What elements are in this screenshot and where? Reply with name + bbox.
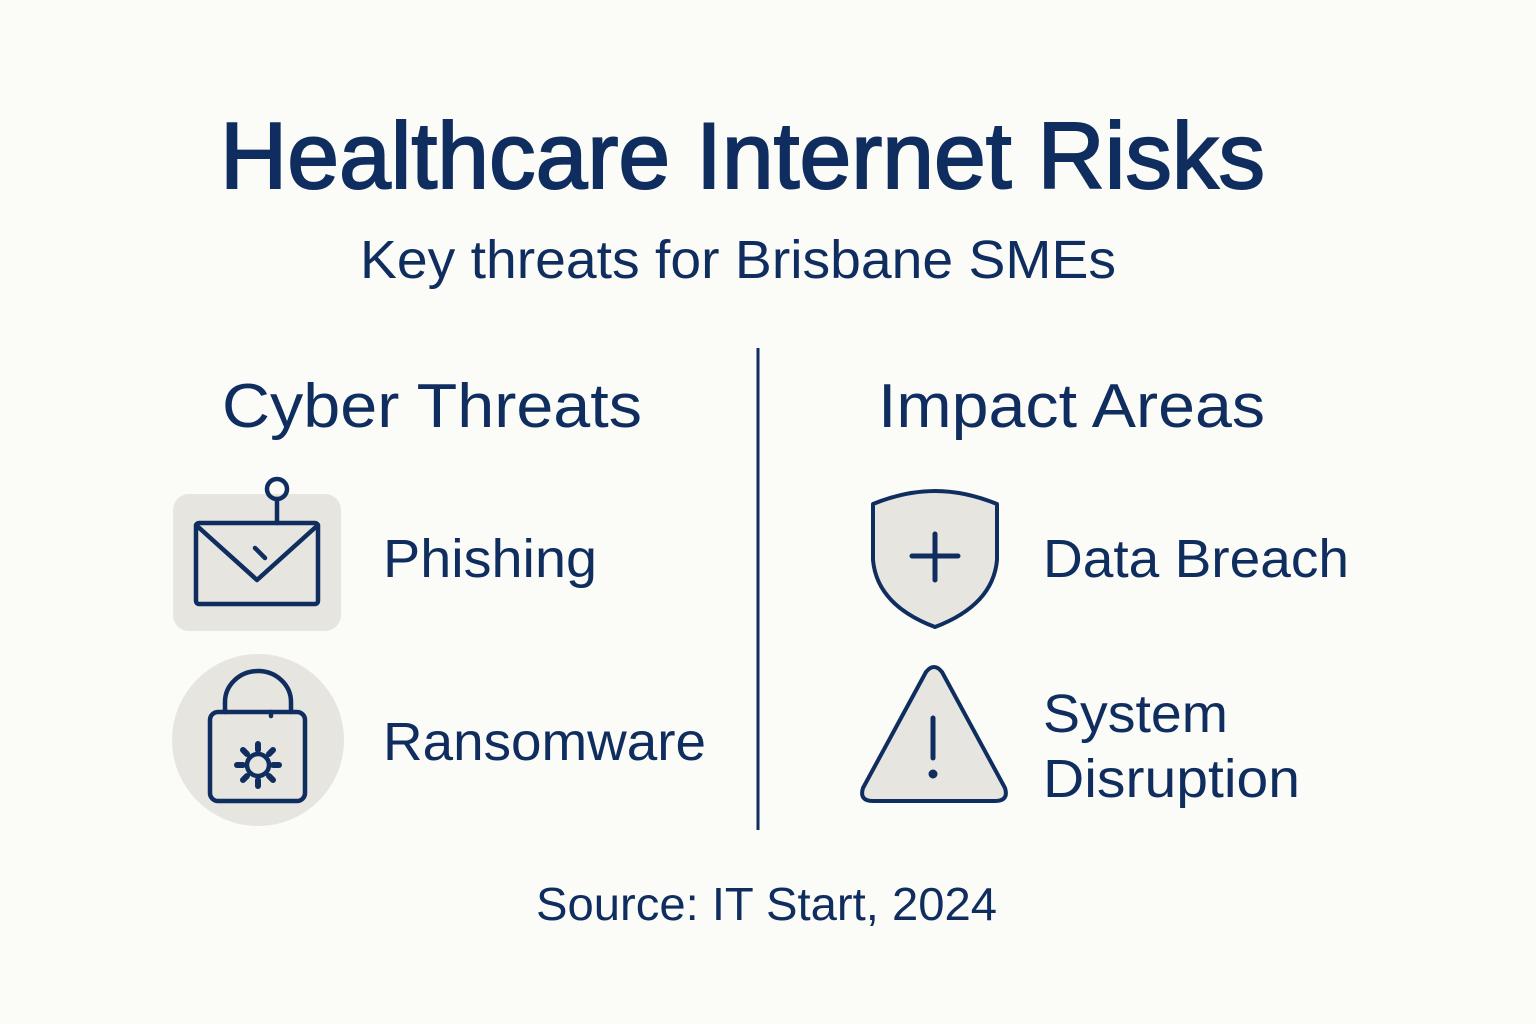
icon: phishing envelope — [173, 479, 341, 631]
source: Source: IT Start, 2024 — [536, 878, 997, 930]
title: Healthcare Internet Risks — [220, 103, 1265, 208]
panel: impact areas — [862, 372, 1349, 809]
panel: cyber threats — [172, 372, 706, 826]
label: phishing: Phishing — [383, 529, 597, 589]
label: system disruption: System — [1043, 684, 1228, 744]
icon: warning triangle — [862, 667, 1006, 801]
label: system disruption — [1043, 684, 1300, 809]
heading: cyber threats: Cyber Threats — [222, 372, 642, 441]
label: system disruption: Disruption — [1043, 749, 1300, 809]
icon: shield — [873, 491, 997, 627]
heading: impact areas: Impact Areas — [878, 372, 1265, 441]
label: data breach: Data Breach — [1043, 529, 1349, 589]
label: ransomware: Ransomware — [383, 712, 706, 772]
subtitle: Key threats for Brisbane SMEs — [360, 230, 1116, 290]
icon: ransomware lock — [172, 654, 344, 826]
